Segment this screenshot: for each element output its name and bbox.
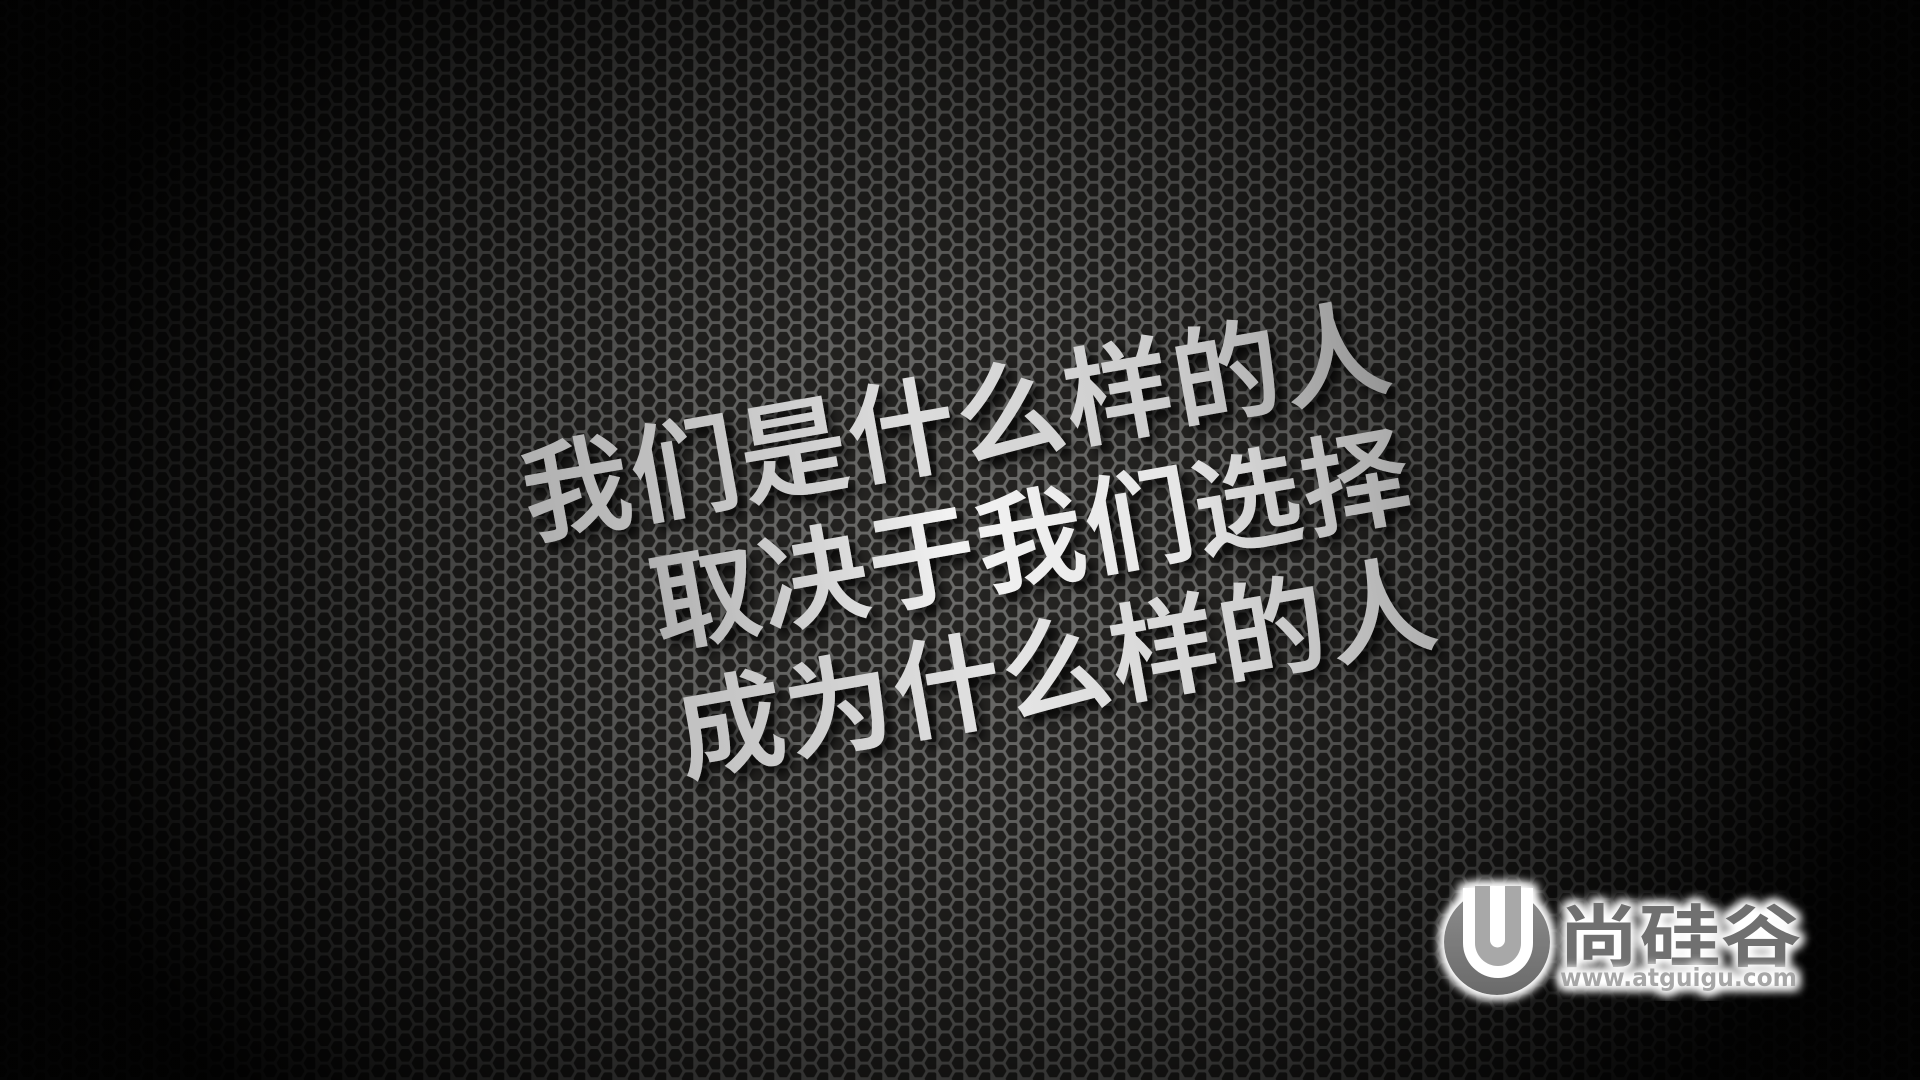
logo wordmark: 尚硅谷: [1558, 900, 1802, 976]
logo: atguigu: [1444, 886, 1802, 995]
quote line 2: 取决于我们选择: [642, 415, 1421, 668]
quote heading: three rotated lines: [513, 287, 1446, 796]
logo url: www.atguigu.com: [1560, 963, 1797, 992]
quote line 3: 成为什么样的人: [667, 543, 1446, 796]
icon: U disc: [1444, 886, 1550, 995]
quote line 1: 我们是什么样的人: [513, 287, 1401, 559]
